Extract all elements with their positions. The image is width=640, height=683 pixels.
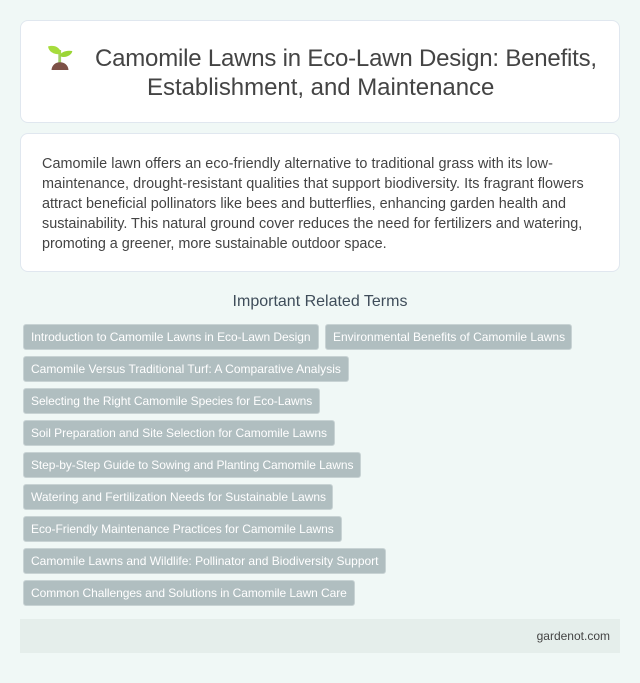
term: Common Challenges and Solutions in Camomile Lawn Care <box>31 586 347 600</box>
intro paragraph: sustainability. This natural ground cover reduces the need for fertilizers and watering, <box>42 216 582 232</box>
term: Soil Preparation and Site Selection for Camomile Lawns <box>31 426 327 440</box>
term: Camomile Versus Traditional Turf: A Comparative Analysis <box>31 362 341 376</box>
intro paragraph <box>42 156 584 252</box>
term <box>23 388 320 414</box>
intro paragraph: Camomile lawn offers an eco-friendly alternative to traditional grass with its low- <box>42 156 553 172</box>
term: Environmental Benefits of Camomile Lawns <box>333 330 565 344</box>
term: Eco-Friendly Maintenance Practices for Camomile Lawns <box>31 522 334 536</box>
term <box>23 452 360 478</box>
term: Camomile Lawns and Wildlife: Pollinator and Biodiversity Support <box>31 554 378 568</box>
term <box>23 548 386 574</box>
term: Selecting the Right Camomile Species for Eco-Lawns <box>31 394 312 408</box>
intro paragraph: maintenance, drought-resistant qualities that support biodiversity. Its fragrant flowers <box>42 176 584 192</box>
header card <box>20 20 620 123</box>
intro paragraph: attract beneficial pollinators like bees and butterflies, enhancing garden health and <box>42 196 566 212</box>
term <box>23 516 342 542</box>
term <box>23 356 348 382</box>
term <box>23 420 334 446</box>
term <box>23 484 333 510</box>
term: Step-by-Step Guide to Sowing and Planting Camomile Lawns <box>31 458 353 472</box>
title <box>95 45 597 101</box>
term: Introduction to Camomile Lawns in Eco-Lawn Design <box>31 330 311 344</box>
footer bar <box>20 619 620 653</box>
term <box>23 580 354 606</box>
intro paragraph: promoting a greener, more sustainable outdoor space. <box>42 236 387 252</box>
icon: seedling <box>48 46 72 70</box>
footer source: gardenot.com <box>537 629 610 643</box>
intro card <box>20 133 620 272</box>
section heading: Important Related Terms <box>233 293 407 310</box>
title: Camomile Lawns in Eco-Lawn Design: Benefits, <box>95 45 597 72</box>
term: Watering and Fertilization Needs for Sustainable Lawns <box>31 490 326 504</box>
term <box>23 324 318 350</box>
terms list <box>23 324 572 606</box>
term <box>325 324 572 350</box>
title: Establishment, and Maintenance <box>147 74 494 101</box>
